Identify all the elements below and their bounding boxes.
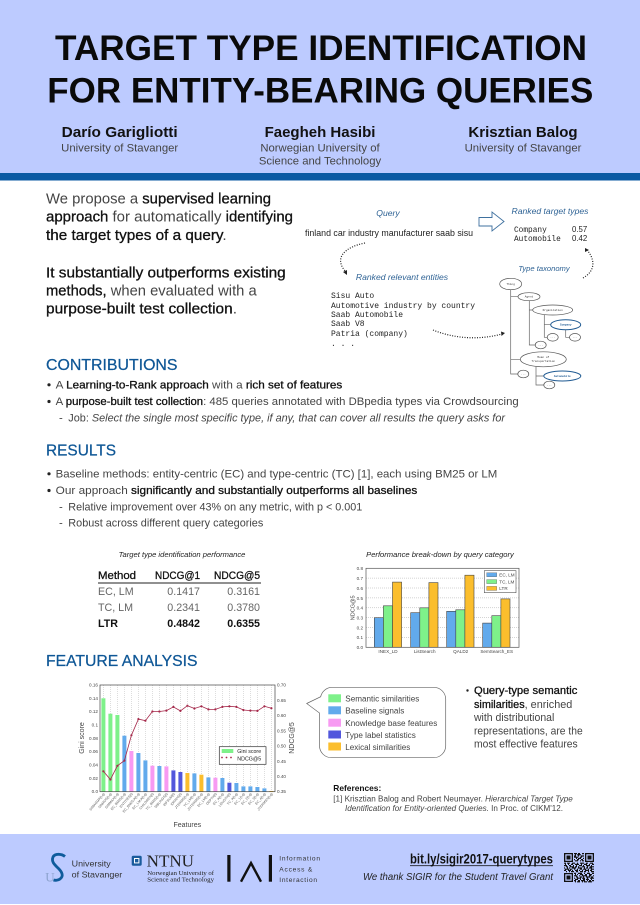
ranked target types: 0.42 [572, 234, 587, 243]
left axis: 0.02 [89, 776, 98, 781]
ranked relevant entities: Patria (company) [331, 330, 408, 339]
logo: NTNU: Norwegian University of [147, 870, 214, 877]
logo: NTNU: Science and Technology [147, 877, 214, 883]
feature tick labels: SIMMAX(t,q) [104, 792, 120, 810]
type taxonomy tree: Automobile [554, 374, 571, 378]
table: target type identification performance: LTR [98, 618, 118, 630]
ranked target types: Ranked target types [512, 206, 589, 216]
table: target type identification performance: 0.3161 [227, 586, 260, 598]
right axis: 0.60 [277, 713, 286, 718]
references: References: [333, 783, 381, 793]
bar chart: performance break-down by query category [350, 550, 519, 654]
ranked relevant entities [331, 272, 475, 349]
legend: knowledge base features: Knowledge base features [345, 719, 437, 728]
logo: IAI Information Access and Interaction [227, 855, 320, 884]
heading: contributions: CONTRIBUTIONS [46, 357, 178, 374]
bars [374, 575, 510, 647]
left axis: 0.06 [89, 749, 98, 754]
type taxonomy tree: Type taxonomy [518, 264, 571, 273]
author: Faegheh Hasibi: Norwegian University of [260, 143, 381, 155]
author: Darío Garigliotti: Darío Garigliotti [62, 124, 178, 141]
results list: - [59, 502, 63, 514]
query: Query [376, 208, 400, 218]
ranked target types [512, 206, 589, 244]
feature tick labels: TC_K(t,q) [226, 792, 239, 806]
type taxonomy tree: ... [538, 344, 543, 347]
table: target type identification performance: NDCG@5 [214, 570, 260, 582]
logo: NTNU: NTNU [147, 852, 194, 871]
contributions list: - [59, 412, 63, 424]
author: Krisztian Balog: University of Stavanger [465, 143, 582, 155]
intro text: We propose a supervised learning [46, 191, 271, 207]
author: Faegheh Hasibi [259, 124, 381, 168]
right axis: 0.65 [277, 698, 286, 703]
chart: gini score and NDCG@5 per feature: Gini score [79, 722, 86, 754]
feature tick labels: JTERMS(t,q) [174, 792, 190, 810]
logo: IAI Information Access and Interaction: Access & [279, 867, 313, 874]
table: target type identification performance: 0.3780 [227, 602, 260, 614]
chart: gini score and NDCG@5 per feature [79, 682, 296, 829]
ranked relevant entities: Saab Automobile [331, 311, 403, 320]
arrow: query to entities [341, 243, 365, 275]
query [305, 208, 473, 239]
ranked relevant entities: Automotive industry by country [331, 302, 475, 311]
table: target type identification performance: NDCG@1 [155, 570, 200, 582]
feature tick labels: SIBLINGS(t) [154, 792, 169, 809]
left axis: 0.16 [89, 682, 98, 688]
author: Darío Garigliotti: University of Stavanger [61, 143, 178, 155]
left axis: 0.08 [89, 736, 98, 741]
x axis: INEX_LD [378, 649, 398, 654]
results list: Robust across different query categories [68, 518, 264, 530]
chart: gini score and NDCG@5 per feature: Features [173, 822, 202, 829]
feature tick labels: JTERMSN(t,q) [257, 792, 274, 812]
type taxonomy tree: Agent [525, 296, 534, 299]
gini bars [101, 698, 273, 792]
NDCG line [103, 706, 271, 780]
title: TARGET TYPE IDENTIFICATION [55, 29, 587, 68]
contributions list: A Learning-to-Rank approach with a rich set of features [56, 379, 343, 391]
feature tick labels: EC_4(t,q) [254, 792, 267, 806]
ranked relevant entities: Ranked relevant entities [356, 272, 449, 282]
bar chart: performance break-down by query category: Performance break-down by query category [366, 550, 515, 559]
ranked target types: Company [514, 227, 547, 235]
results list: Baseline methods: entity-centric (EC) and type-centric (TC) [1], each using BM25 or LM [56, 468, 497, 480]
y axis: 0.4 [357, 606, 363, 610]
contributions list: Job: Select the single most specific type, if any, that can cover all results the query asks for [68, 412, 506, 424]
right axis: 0.70 [277, 682, 286, 688]
y axis: 0.8 [357, 566, 363, 571]
right axis: 0.40 [277, 774, 286, 779]
references: Identification for Entity-oriented Queries. In Proc. of CIKM'12. [345, 804, 563, 813]
query: finland car industry manufacturer saab sisu [305, 228, 473, 239]
arrow: taxonomy to target types [583, 248, 593, 278]
feature tick labels: LENGTH(t) [218, 792, 232, 808]
feature tick labels: EC_LM(t,q) [197, 792, 211, 808]
y axis: 0.0 [357, 645, 363, 650]
left axis: 0.1 [92, 722, 98, 728]
arrow: entities to taxonomy [433, 330, 505, 338]
legend: LTR [499, 586, 508, 591]
type taxonomy tree: Mean of [537, 355, 549, 359]
references [333, 783, 573, 813]
heading: results: RESULTS [46, 443, 116, 460]
intro text: purpose-built test collection . [46, 301, 237, 317]
intro text: methods, when evaluated with a [46, 284, 257, 300]
type taxonomy tree: ... [572, 336, 578, 339]
type taxonomy tree: Organization [543, 308, 563, 312]
table: target type identification performance [98, 550, 261, 630]
bar chart: performance break-down by query category: NDCG@5 [350, 595, 356, 620]
callout: feature legend [307, 687, 446, 758]
left axis: 0.0 [92, 789, 98, 794]
ranked relevant entities: Saab V8 [331, 320, 365, 329]
contributions list [47, 379, 519, 424]
feature tick labels: IDFAVG(t) [170, 792, 183, 806]
table: target type identification performance: 0.4842 [167, 618, 200, 630]
logo: University of Stavanger: of Stavanger [72, 869, 122, 879]
table: target type identification performance: 0.6355 [227, 618, 260, 630]
type taxonomy tree: ... [547, 384, 552, 387]
left axis: 0.04 [89, 762, 98, 768]
logo: NTNU [132, 852, 214, 883]
ranked target types: Automobile [514, 236, 561, 244]
chart legend: NDCG@5 [237, 757, 261, 763]
legend: type label statistics: Type label statistics [345, 731, 416, 740]
x axis: ListSearch [414, 649, 436, 654]
feature tick labels: SIMAGGR(t,q) [89, 792, 106, 812]
y axis: 0.7 [357, 576, 363, 581]
feature tick labels: EC_2(t,q) [240, 792, 253, 806]
y axis: 0.6 [357, 586, 363, 591]
feature tick labels: TC_LM(t,q) [183, 792, 197, 808]
logo: IAI Information Access and Interaction: Interaction [279, 877, 317, 884]
project link: bit.ly/sigir2017-querytypes [410, 850, 553, 866]
feature tick labels: EC_K(t,q) [212, 792, 225, 806]
chart legend [219, 747, 266, 764]
key finding text: Query-type semantic [474, 685, 578, 697]
key finding text: representations, are the [474, 726, 583, 738]
x axis: SemSearch_ES [480, 649, 513, 654]
ranked relevant entities: Sisu Auto [331, 292, 374, 301]
y axis: 0.3 [357, 616, 363, 620]
heading: feature analysis: FEATURE ANALYSIS [46, 653, 198, 670]
feature tick labels: EC_3(t,q) [247, 792, 260, 806]
y axis: 0.1 [357, 635, 363, 640]
contributions list: A purpose-built test collection: 485 queries annotated with DBpedia types via Crowdsourcing [56, 396, 519, 408]
logo: University of Stavanger: University [72, 859, 111, 869]
results list [47, 468, 497, 530]
key finding text: similarities, enriched [474, 699, 572, 711]
ranked relevant entities: . . . [331, 340, 355, 349]
author: Darío Garigliotti [61, 124, 178, 155]
x axis [378, 649, 513, 654]
left axis [89, 682, 98, 794]
logo: University of Stavanger: U [45, 870, 55, 885]
type taxonomy tree: Company [560, 324, 572, 327]
legend [484, 571, 516, 593]
left axis: 0.14 [89, 696, 98, 701]
feature tick labels: CHILDREN(t) [138, 792, 155, 810]
author: Faegheh Hasibi: Science and Technology [259, 156, 381, 168]
intro text: the target types of a query . [46, 228, 227, 244]
type taxonomy tree [500, 264, 581, 389]
author: Faegheh Hasibi: Faegheh Hasibi [265, 124, 375, 141]
feature tick labels: JNTERMS(t,q) [187, 792, 204, 812]
table: target type identification performance: Target type identification performance [119, 550, 245, 559]
key finding text: with distributional [473, 712, 554, 724]
right axis: 0.55 [277, 728, 286, 733]
feature tick labels: EC_BM25,K(t,q) [122, 792, 141, 814]
table: target type identification performance: 0.2341 [167, 602, 200, 614]
table: target type identification performance: TC, LM [98, 602, 133, 614]
pipeline diagram [305, 206, 593, 389]
type taxonomy tree: ... [550, 336, 555, 339]
intro text: approach for automatically identifying [46, 210, 293, 226]
feature tick labels [89, 792, 274, 814]
x axis: QALD2 [453, 649, 469, 654]
title: FOR ENTITY-BEARING QUERIES [47, 72, 593, 110]
legend: semantic similarities: Semantic similarities [345, 694, 419, 703]
type taxonomy tree: ... [521, 373, 526, 376]
right axis: 0.50 [277, 744, 286, 748]
key finding text [466, 685, 583, 750]
footer band [0, 834, 640, 904]
logo: IAI Information Access and Interaction: Information [279, 856, 320, 863]
key finding text: most effective features [474, 738, 578, 750]
feature tick labels: SIMAVG(t,q) [98, 792, 113, 809]
left axis: 0.12 [89, 709, 98, 714]
header band [0, 0, 640, 180]
feature tick labels: EC_BM25(t,q) [110, 792, 127, 811]
legend: lexical similarities: Lexical similarities [345, 743, 410, 752]
title [47, 29, 593, 110]
type taxonomy tree: Transportation [532, 359, 555, 363]
icon: QR code [564, 853, 594, 882]
feature tick labels: DEPTH(t) [205, 792, 218, 806]
feature tick labels: TC_BM25(t,q) [145, 792, 162, 811]
logo: University of Stavanger [45, 854, 122, 885]
type taxonomy tree: Thing [506, 282, 515, 286]
author: Krisztian Balog: Krisztian Balog [468, 124, 578, 141]
y axis: 0.2 [357, 626, 363, 630]
table: target type identification performance: 0.1417 [167, 586, 200, 598]
arrow: query to ranked types [479, 212, 504, 231]
intro text: It substantially outperforms existing [46, 265, 286, 281]
feature tick labels: ENTITIES(t) [119, 792, 134, 809]
table: target type identification performance: EC, LM [98, 586, 134, 598]
ranked target types: 0.57 [572, 225, 587, 234]
intro text [46, 191, 293, 317]
feature tick labels: EC_1(t,q) [233, 792, 246, 806]
chart: gini score and NDCG@5 per feature: NDCG@5 [289, 722, 296, 754]
results list: Our approach significantly and substantially outperforms all baselines [56, 485, 418, 497]
legend: TC, LM [499, 579, 515, 584]
chart legend: Gini score [237, 749, 261, 755]
feature tick labels: EC_LM,K(t,q) [131, 792, 148, 810]
right axis [277, 682, 286, 794]
author: Krisztian Balog [465, 124, 582, 155]
table: target type identification performance: Method [98, 570, 136, 582]
feature tick labels: IDFSUM(t) [162, 792, 176, 807]
right axis: 0.35 [277, 789, 286, 794]
y axis: 0.5 [357, 596, 363, 601]
references: [1] Krisztian Balog and Robert Neumayer. Hierarchical Target Type [333, 794, 573, 803]
results list: - [59, 518, 63, 530]
right axis: 0.45 [277, 759, 286, 764]
results list: Relative improvement over 43% on any metric, with p < 0.001 [68, 502, 362, 514]
legend: baseline signals: Baseline signals [345, 706, 404, 716]
acknowledgement: We thank SIGIR for the Student Travel Grant [363, 872, 554, 883]
y axis [357, 566, 363, 650]
legend: EC, LM [499, 572, 515, 578]
